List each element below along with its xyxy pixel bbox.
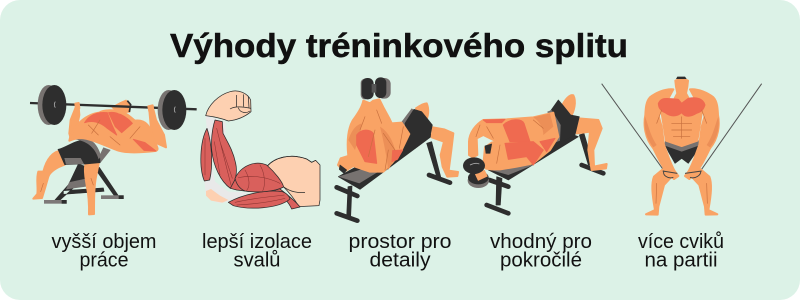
label: vhodný pro pokročilé [490, 231, 592, 272]
label: vyšší objem práce: práce [80, 250, 128, 272]
label: vhodný pro pokročilé: vhodný pro [490, 231, 592, 253]
illustration: dumbbell press on bench [337, 77, 458, 221]
label: prostor pro detaily [348, 231, 452, 272]
label: prostor pro detaily: prostor pro [348, 231, 452, 253]
illustration: flexed arm muscles [201, 91, 320, 209]
illustration: dumbbell fly on bench [463, 95, 607, 213]
title: Výhody tréninkového splitu [170, 27, 628, 64]
label: lepší izolace svalů: lepší izolace [202, 231, 312, 253]
label: více cviků na partii: více cviků [638, 231, 724, 253]
label: lepší izolace svalů: svalů [234, 250, 280, 272]
label: lepší izolace svalů [202, 231, 312, 272]
label: vyšší objem práce [52, 231, 156, 272]
label: více cviků na partii [638, 231, 724, 272]
label: vyšší objem práce: vyšší objem [52, 231, 156, 253]
label: vhodný pro pokročilé: pokročilé [500, 250, 582, 272]
illustration: barbell incline press [30, 85, 197, 214]
illustration: cable crossover standing figure [602, 77, 762, 215]
label: více cviků na partii: na partii [644, 250, 718, 272]
label: prostor pro detaily: detaily [370, 250, 430, 272]
